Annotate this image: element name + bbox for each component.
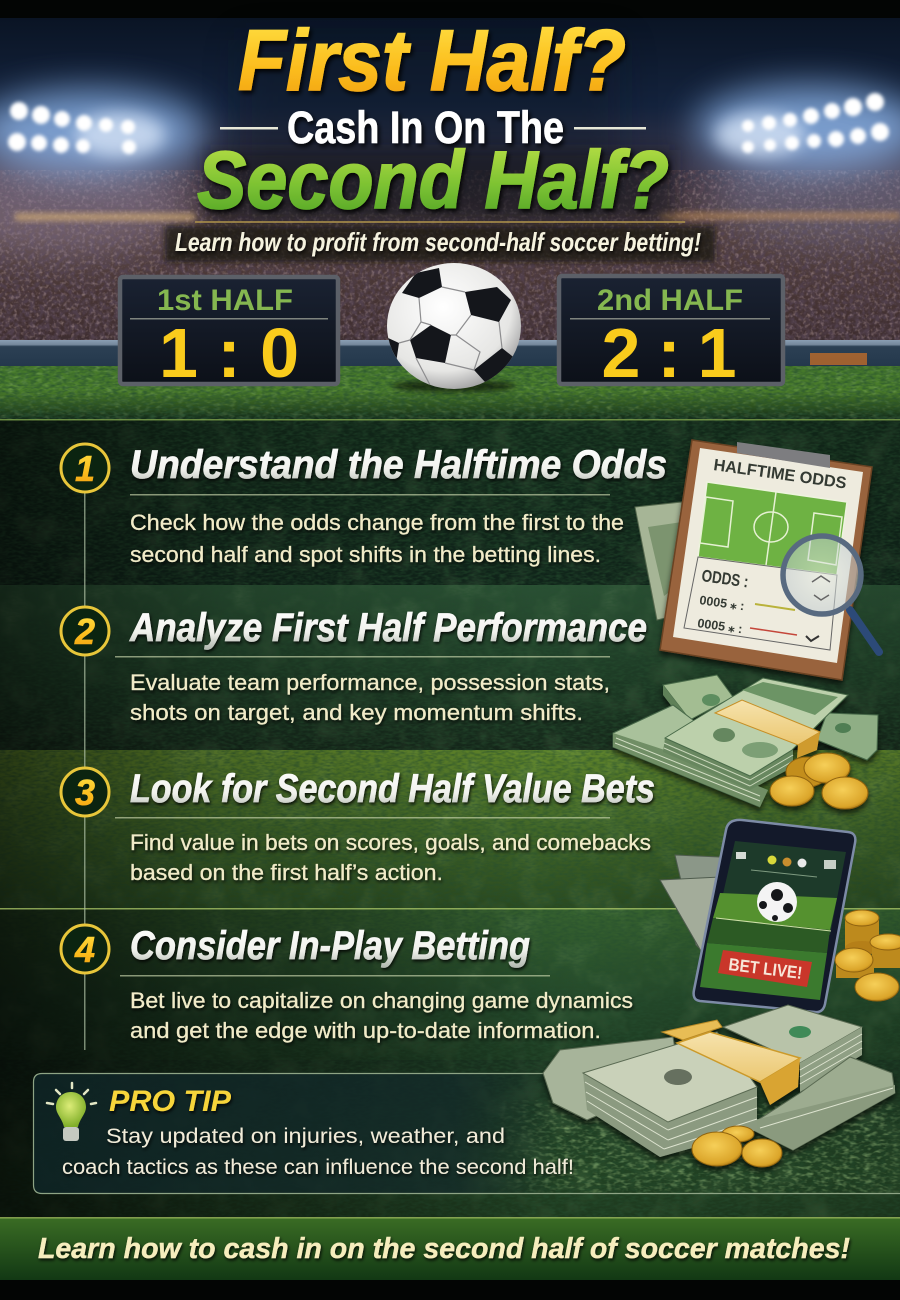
- soccer ball: [386, 263, 521, 392]
- scoreboard: 1st half: 1 : 0: [159, 314, 299, 392]
- icon: phone with bet live: BET LIVE!: [728, 954, 803, 983]
- section bands: [0, 419, 900, 1218]
- icon: large cash stack with coins lower: [543, 1005, 895, 1167]
- pitch strip: [0, 366, 900, 420]
- step 2 heading: Analyze First Half Performance: [129, 606, 647, 650]
- icon: clipboard with halftime odds: ODDS :: [700, 566, 750, 592]
- panel: pro tip: coach tactics as these can influence the second half!: [62, 1156, 574, 1179]
- title line 3: Second Half?: [197, 135, 669, 226]
- grass patch beneath lower cash: [480, 1100, 900, 1194]
- scoreboard: 2nd half: [559, 276, 783, 392]
- step 1: second half and spot shifts in the betting lines.: [130, 542, 601, 567]
- step 4 heading: Consider In-Play Betting: [130, 924, 530, 968]
- icon: magnifying glass: [783, 536, 879, 652]
- step 1 number: [61, 444, 109, 492]
- back left bundle: [663, 675, 733, 720]
- coins: [692, 1126, 782, 1167]
- stadium backdrop: [0, 18, 900, 370]
- scoreboard: 2nd half: 2 : 1: [602, 314, 736, 392]
- title: [165, 13, 715, 262]
- stadium lights left: [8, 102, 136, 154]
- icon: cash stack with coins upper: [613, 675, 878, 809]
- step 3: based on the first half’s action.: [130, 860, 443, 885]
- step 2 number: [61, 607, 109, 655]
- right lower bundle: [747, 1057, 895, 1150]
- step 4 number: 4: [74, 929, 95, 970]
- step 4 text: Bet live to capitalize on changing game dynamics: [130, 988, 633, 1013]
- icon: phone with bet live: [660, 820, 900, 1012]
- step 1 number: 1: [75, 448, 95, 489]
- scoreboard: 2nd half: 2nd HALF: [597, 284, 743, 317]
- step 3 number: [61, 768, 109, 816]
- coins: [770, 753, 868, 809]
- step 3 text: Find value in bets on scores, goals, and comebacks: [130, 830, 651, 855]
- step 2: shots on target, and key momentum shifts.: [130, 700, 583, 725]
- step 1 heading: Understand the Halftime Odds: [130, 443, 667, 487]
- pro tip text: Stay updated on injuries, weather, and: [106, 1125, 505, 1148]
- step 3 number: 3: [75, 772, 95, 813]
- step 3 heading: Look for Second Half Value Bets: [130, 767, 655, 811]
- icon: clipboard with halftime odds: 0005 ⁎ :: [697, 616, 743, 636]
- step 4: [61, 924, 633, 1043]
- ad wall: [0, 340, 900, 366]
- paper band: [715, 700, 820, 745]
- scoreboard: 1st half: 1st HALF: [157, 284, 293, 317]
- subtitle: Learn how to profit from second-half soccer betting!: [175, 227, 701, 257]
- icon: clipboard with halftime odds: 0005 ⁎ :: [699, 593, 745, 613]
- step 2 text: Evaluate team performance, possession stats,: [130, 670, 610, 695]
- footer banner: Learn how to cash in on the second half of soccer matches!: [38, 1233, 850, 1265]
- icon: light bulb: [47, 1083, 96, 1141]
- scoreboard: 1st half: [120, 277, 338, 392]
- pro tip heading: PRO TIP: [109, 1085, 232, 1118]
- back bundle: [723, 1005, 862, 1063]
- icon: coin stacks: [835, 910, 900, 1001]
- step 2: [61, 606, 647, 725]
- title line 2 with side rules: Cash In On The: [287, 102, 564, 153]
- icon: banknotes behind phone: [660, 855, 720, 960]
- icon: banknotes behind clipboard: [635, 502, 682, 620]
- step 4: and get the edge with up-to-date information.: [130, 1018, 601, 1043]
- left bundle: [543, 1037, 680, 1120]
- step 2 number: 2: [74, 611, 95, 652]
- title line 1: First Half?: [238, 13, 626, 109]
- step 3: [61, 767, 655, 885]
- icon: clipboard with halftime odds: HALFTIME ODDS: [712, 456, 848, 493]
- step 1: [61, 443, 667, 567]
- panel: pro tip: [34, 1074, 900, 1194]
- left bundle: [613, 705, 760, 807]
- paper band: [662, 1020, 722, 1040]
- step 1 text: Check how the odds change from the first to the: [130, 510, 624, 535]
- main bundle: [583, 1073, 757, 1157]
- step 4 number: [61, 925, 109, 973]
- stadium lights right: [742, 93, 889, 153]
- main bundle: [663, 738, 793, 790]
- right bundle: [817, 713, 878, 760]
- footer banner: [0, 1217, 900, 1280]
- icon: clipboard with halftime odds: [635, 440, 879, 680]
